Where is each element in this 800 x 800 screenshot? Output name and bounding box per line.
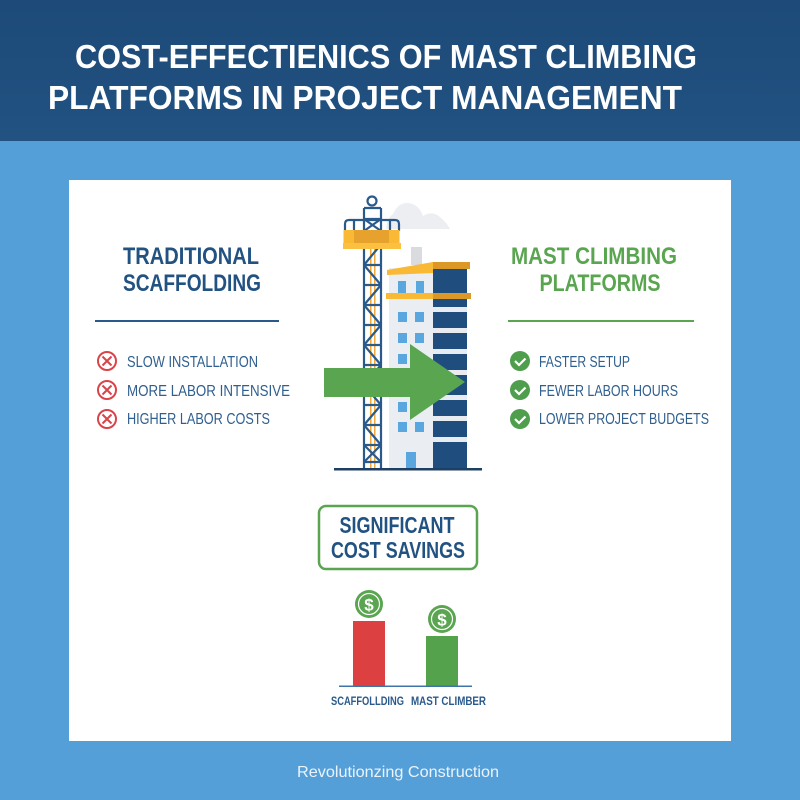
bar: mast climber	[426, 636, 458, 686]
mast tower	[343, 196, 401, 468]
heading: traditional scaffolding: TRADITIONAL	[123, 243, 259, 270]
icon: dollar coin	[355, 590, 383, 618]
list: benefits	[510, 351, 709, 429]
icon: x mark	[98, 381, 116, 399]
title	[48, 38, 697, 116]
list text	[127, 354, 290, 428]
icon: check	[510, 380, 530, 400]
axis labels: SCAFFOLLDING	[331, 694, 404, 708]
building	[386, 247, 471, 468]
icon: x mark	[98, 352, 116, 370]
title: PLATFORMS IN PROJECT MANAGEMENT	[48, 79, 682, 116]
heading: mast climbing platforms: PLATFORMS	[540, 270, 660, 297]
ground line	[334, 468, 482, 470]
list text: LOWER PROJECT BUDGETS	[539, 411, 709, 428]
icon: dollar coin: $	[364, 596, 374, 614]
panel: mast climbing platforms	[508, 243, 709, 429]
list text: SLOW INSTALLATION	[127, 354, 258, 371]
bar: scaffolding	[353, 621, 385, 686]
heading: traditional scaffolding: SCAFFOLDING	[123, 270, 261, 297]
illustration: mast climber and building	[324, 196, 482, 470]
arrow	[324, 344, 465, 420]
list text: MORE LABOR INTENSIVE	[127, 383, 290, 400]
white content panel	[69, 180, 731, 741]
heading: mast climbing platforms: MAST CLIMBING	[511, 243, 677, 270]
icon: check	[510, 409, 530, 429]
icon: dollar coin	[428, 605, 456, 633]
icon: dollar coin: $	[437, 610, 447, 630]
footer text: Revolutionzing Construction	[297, 764, 499, 781]
panel: traditional scaffolding	[95, 243, 290, 428]
list text: FEWER LABOR HOURS	[539, 383, 678, 400]
callout: significant cost savings	[319, 506, 477, 569]
heading: mast climbing platforms	[511, 243, 677, 297]
bar chart: cost comparison	[331, 590, 486, 708]
heading: traditional scaffolding	[123, 243, 261, 297]
callout: significant cost savings: SIGNIFICANT	[340, 512, 454, 538]
header band	[0, 0, 800, 141]
list: drawbacks	[98, 352, 290, 428]
list text	[539, 354, 709, 428]
icon: check	[510, 351, 530, 371]
icon: x mark	[98, 410, 116, 428]
callout: significant cost savings: COST SAVINGS	[331, 537, 465, 563]
icon: cloud	[386, 203, 450, 229]
axis labels	[331, 694, 486, 708]
title: COST-EFFECTIENICS OF MAST CLIMBING	[75, 38, 697, 75]
list text: FASTER SETUP	[539, 354, 630, 371]
list text: HIGHER LABOR COSTS	[127, 411, 270, 428]
axis labels: MAST CLIMBER	[411, 694, 486, 708]
